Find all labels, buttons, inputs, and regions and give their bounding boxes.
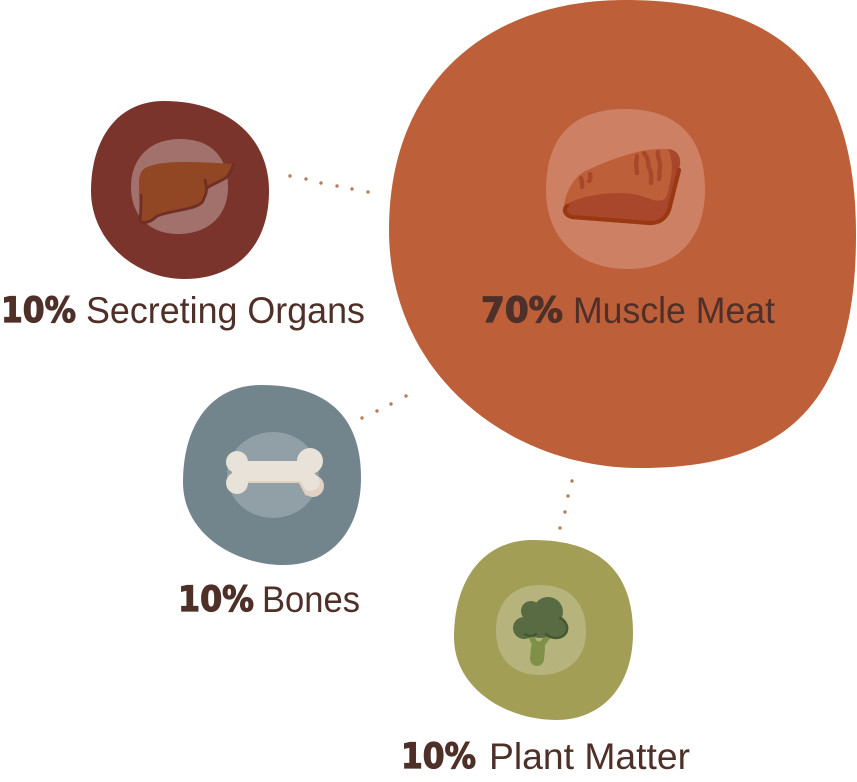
label: 10% Bones: 10% (178, 580, 254, 620)
blob: secreting organs (91, 101, 269, 279)
blob: plant matter (454, 540, 633, 720)
panel: muscle meat (389, 0, 856, 468)
label: 10% Plant Matter: 10% (401, 737, 476, 777)
connector: bones to muscle meat (360, 394, 408, 420)
icon: meat (563, 149, 680, 223)
label: 10% Secreting Organs: Secreting Organs (86, 290, 365, 331)
blob: bones (183, 385, 361, 565)
icon backdrop: liver (131, 139, 228, 234)
label: 70% Muscle Meat: Muscle Meat (573, 290, 776, 331)
label: 10% Bones: Bones (262, 579, 360, 620)
label: 10% Secreting Organs: 10% (1, 291, 76, 331)
icon backdrop: muscle meat (546, 109, 705, 269)
label: 10% Plant Matter (401, 736, 690, 777)
label: 70% Muscle Meat (481, 290, 776, 331)
label: 70% Muscle Meat: 70% (481, 291, 563, 331)
icon: bone (226, 448, 324, 497)
icon: liver (139, 162, 233, 223)
blob: muscle meat (389, 0, 856, 468)
icon backdrop: bones (227, 432, 319, 518)
icon backdrop: plant matter (496, 585, 586, 675)
connector: organs to muscle meat (288, 174, 370, 194)
connector: plant matter to muscle meat (558, 479, 574, 530)
icon: broccoli (513, 597, 567, 659)
panel: plant matter (401, 540, 690, 777)
panel: secreting organs (1, 101, 365, 331)
panel: bones (178, 385, 361, 620)
label: 10% Plant Matter: Plant Matter (489, 736, 690, 777)
label: 10% Bones (178, 579, 360, 620)
